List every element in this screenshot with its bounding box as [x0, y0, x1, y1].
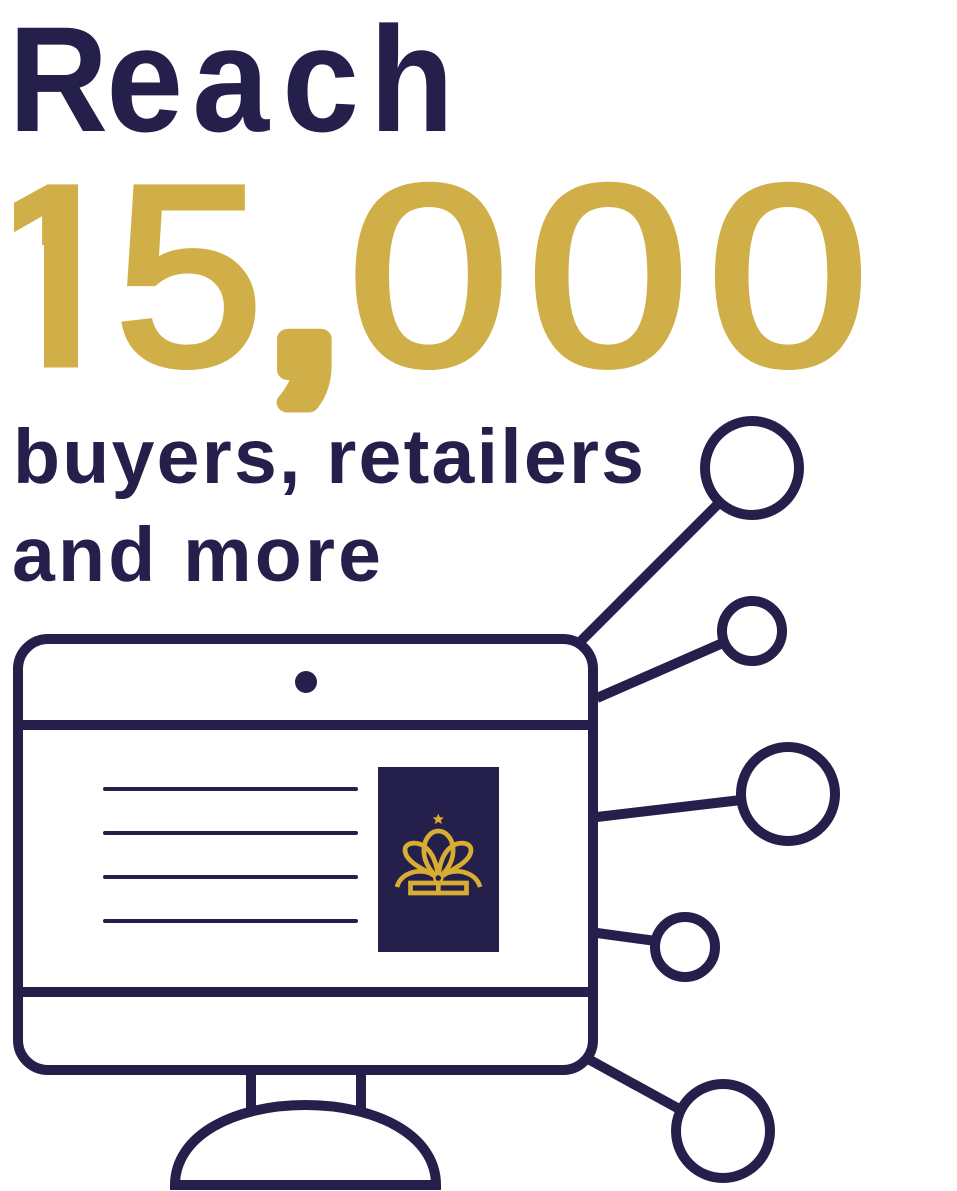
big number: 15,000: 5 — [115, 134, 263, 419]
subheading: buyers, retailers and more: and more — [12, 512, 381, 598]
big number: 15,000 — [14, 182, 862, 412]
monitor frame — [18, 639, 593, 1070]
subheading: buyers, retailers and more: buyers, retailers — [13, 414, 644, 500]
network connectors and nodes — [580, 421, 835, 1178]
subheading: buyers, retailers and more — [12, 414, 644, 598]
node 3 — [597, 747, 835, 841]
big number: 15,000: 0 — [348, 133, 509, 418]
camera dot — [295, 671, 317, 693]
icon: crown — [397, 814, 480, 893]
monitor stand — [175, 1072, 436, 1185]
node 2 — [597, 601, 782, 698]
navy card with crown logo — [378, 767, 499, 952]
big number: 15,000: 0 — [708, 133, 868, 418]
monitor — [18, 639, 593, 1185]
big number: 15,000: 0 — [528, 133, 688, 418]
node 5 — [590, 1060, 770, 1178]
screen dividers — [18, 725, 593, 992]
text lines — [105, 789, 356, 921]
node 1 — [580, 421, 799, 642]
big number: 15,000: , — [272, 180, 336, 415]
heading: Reach: Reach — [8, 0, 454, 163]
node 4 — [597, 917, 715, 977]
